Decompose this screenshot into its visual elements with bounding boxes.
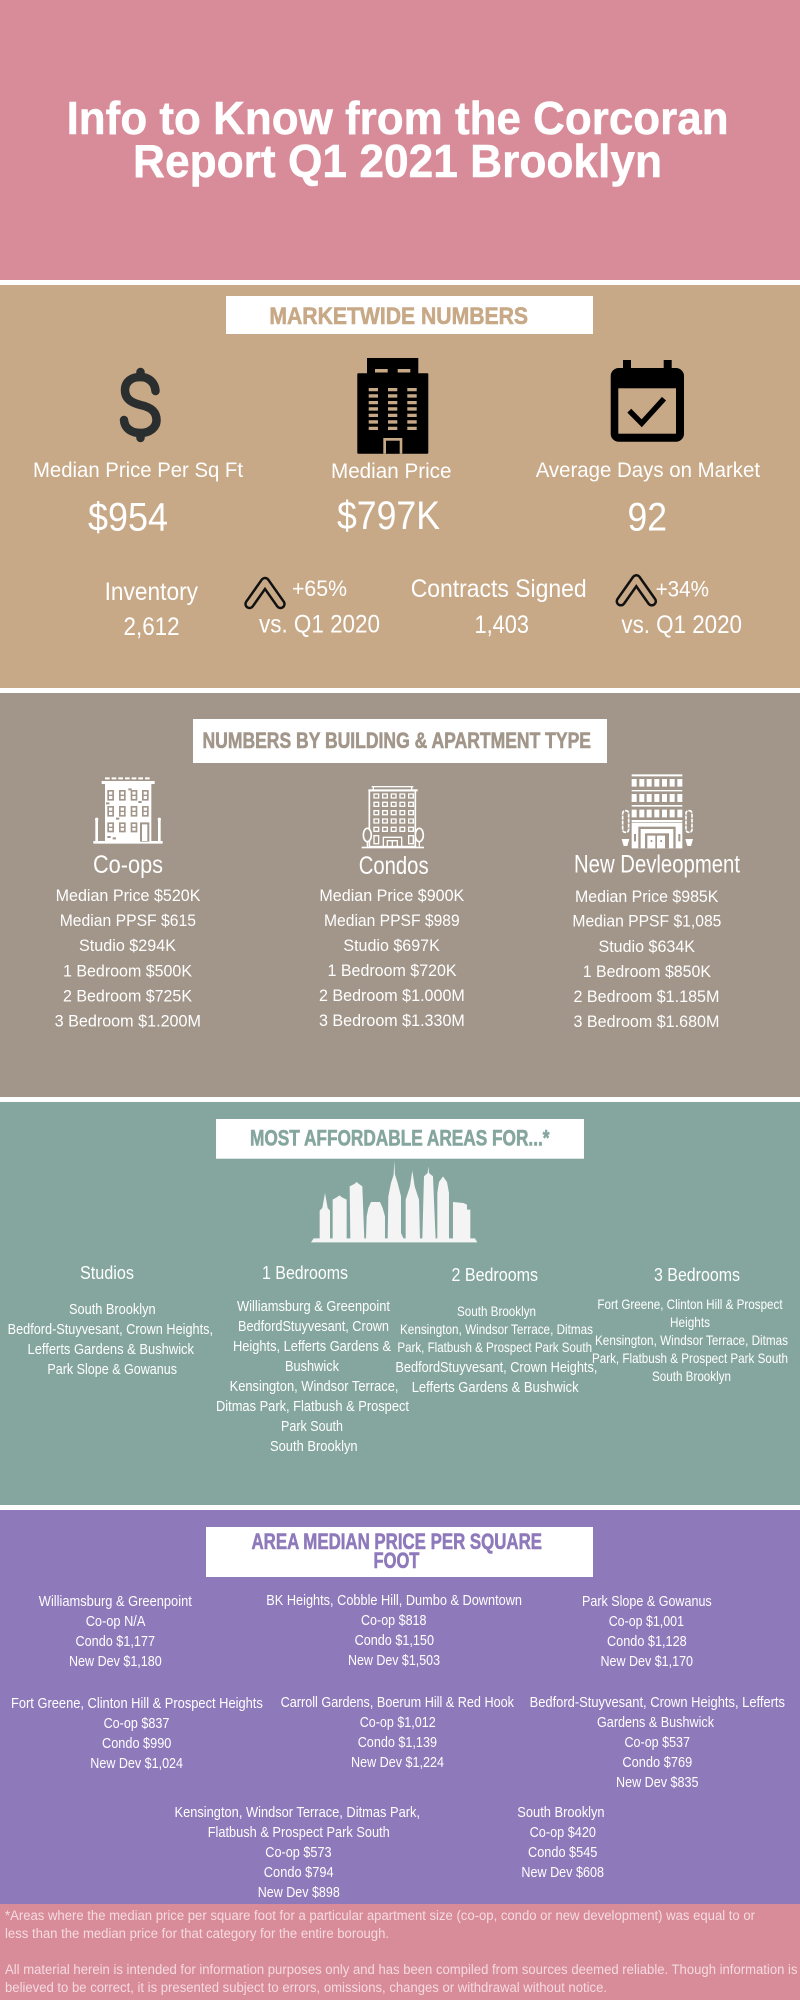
area: kensington, windsor terrace, ditmas park, flatbush and prospect park south	[174, 1804, 420, 1901]
column: condos: 2 Bedroom $1.000M	[319, 986, 465, 1005]
disclaimer: All material herein is intended for information purposes only and has been compiled from sources deemed reliable. Though information is	[5, 1962, 798, 1977]
heading: numbers by building and apartment type: NUMBERS BY BUILDING & APARTMENT TYPE	[202, 728, 591, 753]
area: williamsburg and greenpoint: Condo $1,177	[76, 1633, 155, 1650]
column: 2 bedrooms: 2 Bedrooms	[452, 1264, 538, 1285]
column: studios	[8, 1262, 213, 1378]
column: 1 bedrooms: BedfordStuyvesant, Crown	[238, 1318, 389, 1335]
column: studios: Park Slope & Gowanus	[47, 1361, 177, 1378]
column: 2 bedrooms: Park, Flatbush & Prospect Park South	[397, 1339, 592, 1355]
area: south brooklyn	[517, 1804, 605, 1881]
area: south brooklyn: Co-op $420	[530, 1824, 596, 1841]
area: williamsburg and greenpoint: Co-op N/A	[86, 1613, 145, 1630]
column: new development: Studio $634K	[598, 937, 696, 956]
column: 2 bedrooms: BedfordStuyvesant, Crown Heights,	[395, 1359, 597, 1376]
column: new development: 2 Bedroom $1.185M	[574, 987, 719, 1006]
column: studios: Bedford-Stuyvesant, Crown Heights,	[8, 1321, 213, 1338]
column: co-ops: Co-ops	[93, 851, 163, 879]
column: condos	[319, 852, 465, 1030]
column: 1 bedrooms: Park South	[281, 1418, 343, 1435]
area: williamsburg and greenpoint: Williamsburg & Greenpoint	[39, 1593, 193, 1610]
column: new development: 1 Bedroom $850K	[583, 962, 712, 981]
area: kensington, windsor terrace, ditmas park, flatbush and prospect park south: Condo $794	[264, 1864, 334, 1881]
stat: contracts change: vs. Q1 2020	[621, 611, 742, 639]
stat: contracts change	[621, 577, 742, 639]
panel: area median price per square foot	[0, 1510, 800, 1904]
stat: median price per sq ft: Median Price Per Sq Ft	[33, 458, 243, 482]
stat: contracts signed	[411, 575, 587, 639]
column: condos: 1 Bedroom $720K	[328, 961, 457, 980]
heading: numbers by building and apartment type	[193, 719, 607, 763]
panel: title banner	[0, 0, 800, 280]
column: condos: Median PPSF $989	[324, 911, 460, 930]
stat: median price per sq ft: $954	[88, 496, 168, 540]
heading: area median price per square foot: FOOT	[374, 1548, 420, 1573]
column: 3 bedrooms: South Brooklyn	[652, 1368, 731, 1384]
stat: inventory: Inventory	[105, 578, 198, 606]
icon: new development building	[622, 774, 693, 848]
column: condos: 3 Bedroom $1.330M	[319, 1011, 465, 1030]
heading: most affordable areas: MOST AFFORDABLE AREAS FOR...*	[250, 1126, 550, 1151]
heading: marketwide numbers	[226, 296, 593, 334]
column: studios: South Brooklyn	[69, 1301, 156, 1318]
area: kensington, windsor terrace, ditmas park, flatbush and prospect park south: Co-op $573	[265, 1844, 332, 1861]
icon: office building	[357, 358, 428, 454]
stat: inventory: 2,612	[124, 613, 180, 641]
column: co-ops: 2 Bedroom $725K	[63, 987, 193, 1006]
disclaimer	[5, 1962, 798, 1995]
column: 3 bedrooms: 3 Bedrooms	[654, 1264, 740, 1285]
column: condos: Median Price $900K	[319, 886, 465, 905]
area: fort greene, clinton hill and prospect heights: Co-op $837	[104, 1715, 169, 1732]
area: bedford-stuyvesant, crown heights, lefferts gardens and bushwick: New Dev $835	[616, 1774, 698, 1791]
area: park slope and gowanus: Co-op $1,001	[609, 1613, 684, 1630]
column: 2 bedrooms	[395, 1264, 597, 1396]
column: condos: Studio $697K	[343, 936, 440, 955]
area: kensington, windsor terrace, ditmas park, flatbush and prospect park south: Flatbush & Prospect Park South	[208, 1824, 390, 1841]
column: co-ops	[55, 851, 201, 1031]
stat: inventory change	[259, 576, 380, 639]
column: co-ops: Studio $294K	[79, 936, 177, 955]
heading: area median price per square foot: AREA MEDIAN PRICE PER SQUARE	[252, 1529, 542, 1554]
area: fort greene, clinton hill and prospect heights: New Dev $1,024	[90, 1755, 183, 1772]
area: carroll gardens, boerum hill and red hook: Carroll Gardens, Boerum Hill & Red Hook	[281, 1694, 514, 1711]
icon: co-op brownstone	[93, 777, 163, 844]
footnote	[5, 1908, 755, 1941]
column: 1 bedrooms: 1 Bedrooms	[262, 1262, 348, 1283]
area: carroll gardens, boerum hill and red hook	[281, 1694, 514, 1771]
area: bk heights, cobble hill, dumbo and downtown: Co-op $818	[361, 1612, 426, 1629]
heading: most affordable areas	[216, 1119, 584, 1159]
area: park slope and gowanus	[582, 1593, 712, 1670]
icon: calendar with check	[611, 360, 684, 442]
stat: contracts signed: Contracts Signed	[411, 575, 587, 603]
area: bedford-stuyvesant, crown heights, lefferts gardens and bushwick: Gardens & Bushwick	[597, 1714, 714, 1731]
area: fort greene, clinton hill and prospect heights: Fort Greene, Clinton Hill & Prospect Heights	[11, 1695, 263, 1712]
icon: up chevron inventory	[250, 582, 280, 604]
area: bedford-stuyvesant, crown heights, lefferts gardens and bushwick: Condo $769	[622, 1754, 692, 1771]
panel: numbers by building and apartment type	[0, 693, 800, 1097]
area: bk heights, cobble hill, dumbo and downtown: Condo $1,150	[355, 1632, 434, 1649]
panel: marketwide numbers	[0, 285, 800, 688]
panel: footnote and disclaimer	[0, 1904, 800, 2000]
heading: area median price per square foot	[206, 1527, 593, 1577]
column: new development: Median PPSF $1,085	[572, 912, 721, 931]
icon: city skyline	[311, 1161, 477, 1242]
column: 2 bedrooms: Lefferts Gardens & Bushwick	[412, 1379, 579, 1396]
title	[67, 92, 729, 187]
panel: most affordable areas	[0, 1102, 800, 1505]
area: kensington, windsor terrace, ditmas park, flatbush and prospect park south: New Dev $898	[258, 1884, 340, 1901]
column: new development: New Devleopment	[574, 851, 740, 879]
area: fort greene, clinton hill and prospect heights	[11, 1695, 263, 1772]
column: studios: Studios	[80, 1262, 134, 1283]
icon: condo tower	[362, 786, 424, 848]
column: 2 bedrooms: Kensington, Windsor Terrace, Ditmas	[400, 1321, 593, 1337]
column: condos: Condos	[359, 852, 429, 880]
area: south brooklyn: Condo $545	[528, 1844, 597, 1861]
area: bk heights, cobble hill, dumbo and downtown	[266, 1592, 522, 1669]
area: park slope and gowanus: New Dev $1,170	[600, 1653, 693, 1670]
area: park slope and gowanus: Condo $1,128	[607, 1633, 687, 1650]
stat: contracts change: +34%	[656, 577, 709, 602]
icon: dollar sign	[124, 372, 156, 438]
area: carroll gardens, boerum hill and red hook: New Dev $1,224	[351, 1754, 444, 1771]
stat: average days on market: Average Days on Market	[536, 458, 760, 482]
area: fort greene, clinton hill and prospect heights: Condo $990	[102, 1735, 171, 1752]
stat: average days on market: 92	[628, 496, 667, 540]
column: 3 bedrooms: Heights	[670, 1314, 710, 1330]
area: carroll gardens, boerum hill and red hook: Co-op $1,012	[360, 1714, 436, 1731]
stat: inventory change: +65%	[292, 576, 347, 601]
column: new development	[572, 851, 740, 1031]
column: 2 bedrooms: South Brooklyn	[457, 1303, 536, 1319]
area: williamsburg and greenpoint	[39, 1593, 193, 1670]
stat: inventory	[105, 578, 198, 641]
column: studios: Lefferts Gardens & Bushwick	[28, 1341, 194, 1358]
stat: median price per sq ft	[33, 458, 243, 540]
stat: median price: $797K	[337, 494, 440, 538]
area: kensington, windsor terrace, ditmas park, flatbush and prospect park south: Kensington, Windsor Terrace, Ditmas Park,	[174, 1804, 420, 1821]
column: new development: Median Price $985K	[575, 887, 719, 906]
area: bedford-stuyvesant, crown heights, lefferts gardens and bushwick	[530, 1694, 785, 1791]
column: 1 bedrooms: Williamsburg & Greenpoint	[237, 1298, 391, 1315]
area: south brooklyn: New Dev $608	[521, 1864, 604, 1881]
stat: median price	[331, 459, 452, 538]
stat: average days on market	[536, 458, 760, 540]
column: 1 bedrooms	[216, 1262, 410, 1455]
disclaimer: believed to be correct, it is presented subject to errors, omissions, changes or withdrawal without notice.	[5, 1980, 607, 1995]
heading: marketwide numbers: MARKETWIDE NUMBERS	[269, 303, 528, 330]
column: co-ops: 3 Bedroom $1.200M	[55, 1012, 201, 1031]
column: co-ops: Median PPSF $615	[60, 911, 196, 930]
area: south brooklyn: South Brooklyn	[517, 1804, 605, 1821]
column: 1 bedrooms: Kensington, Windsor Terrace,	[230, 1378, 398, 1395]
column: 1 bedrooms: Heights, Lefferts Gardens &	[233, 1338, 391, 1355]
title: Info to Know from the Corcoran	[67, 92, 729, 144]
title: Report Q1 2021 Brooklyn	[133, 135, 662, 187]
area: carroll gardens, boerum hill and red hook: Condo $1,139	[358, 1734, 437, 1751]
footnote: less than the median price for that category for the entire borough.	[5, 1926, 389, 1941]
area: bedford-stuyvesant, crown heights, lefferts gardens and bushwick: Co-op $537	[624, 1734, 690, 1751]
area: williamsburg and greenpoint: New Dev $1,180	[69, 1653, 162, 1670]
stat: contracts signed: 1,403	[474, 611, 529, 639]
column: new development: 3 Bedroom $1.680M	[574, 1012, 719, 1031]
column: 3 bedrooms	[592, 1264, 788, 1384]
area: bk heights, cobble hill, dumbo and downtown: New Dev $1,503	[348, 1652, 440, 1669]
column: 1 bedrooms: Bushwick	[285, 1358, 339, 1375]
area: park slope and gowanus: Park Slope & Gowanus	[582, 1593, 712, 1610]
column: co-ops: 1 Bedroom $500K	[63, 962, 193, 981]
stat: inventory change: vs. Q1 2020	[259, 611, 380, 639]
icon: up chevron contracts	[621, 579, 652, 601]
area: bk heights, cobble hill, dumbo and downtown: BK Heights, Cobble Hill, Dumbo & Downtown	[266, 1592, 522, 1609]
column: 1 bedrooms: South Brooklyn	[270, 1438, 358, 1455]
column: co-ops: Median Price $520K	[56, 886, 201, 905]
column: 1 bedrooms: Ditmas Park, Flatbush & Prospect	[216, 1398, 410, 1415]
stat: median price: Median Price	[331, 459, 452, 483]
footnote: *Areas where the median price per square foot for a particular apartment size (co-op, condo or new development) was equal to or	[5, 1908, 755, 1923]
